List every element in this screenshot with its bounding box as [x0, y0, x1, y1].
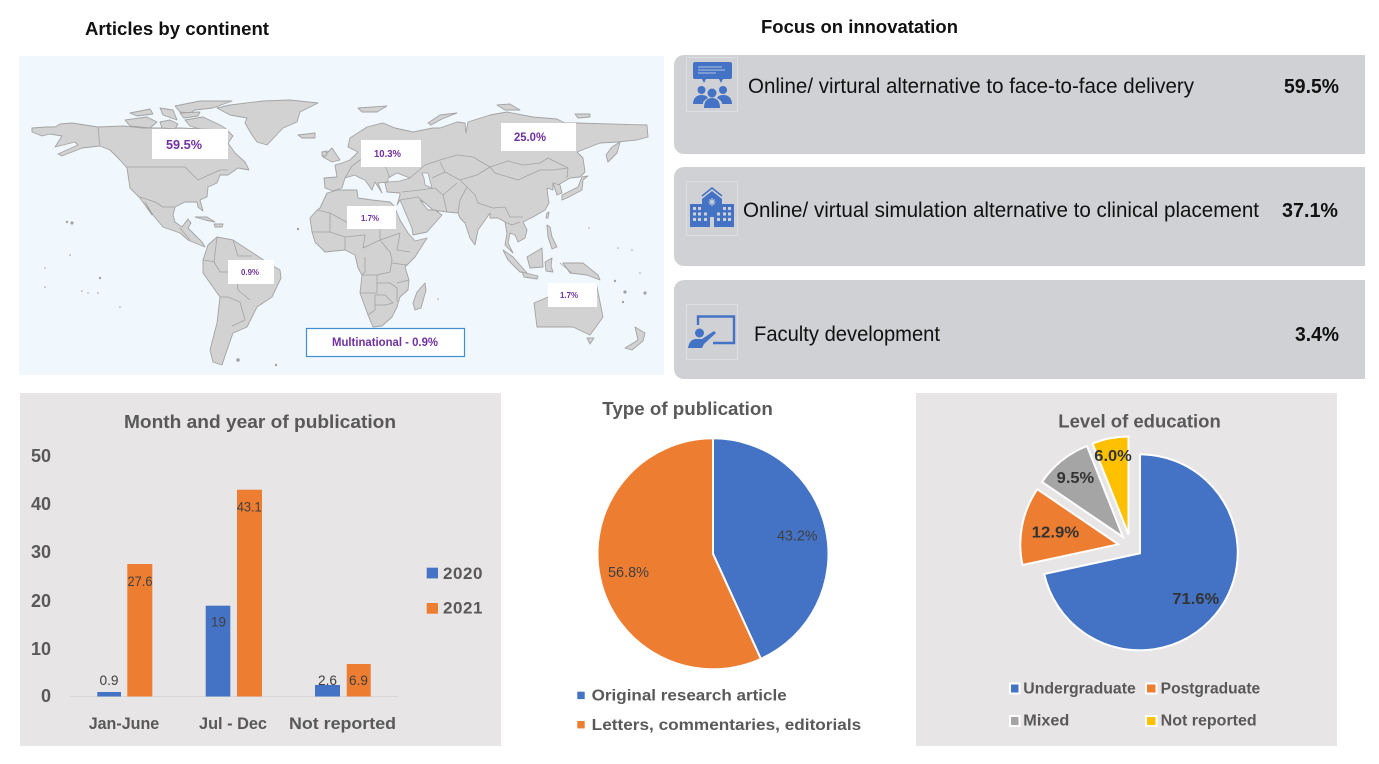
chart title: Month and year of publication	[124, 412, 396, 432]
pie labels	[608, 528, 818, 581]
panel: world map	[19, 56, 664, 375]
data labels: 19	[211, 614, 226, 630]
legend: Letters, commentaries, editorials	[592, 717, 861, 734]
pie labels: 9.5%	[1057, 470, 1094, 487]
legend: Not reported	[1161, 713, 1257, 730]
y axis labels: 50	[31, 446, 51, 466]
label: Multinational 0.9%: Multinational - 0.9%	[332, 335, 438, 349]
bars: Jul-Dec	[206, 490, 262, 696]
data labels	[100, 499, 368, 688]
data labels: 2.6	[318, 672, 337, 688]
chart title: Type of publication	[602, 399, 773, 419]
data labels: 6.9	[349, 672, 368, 688]
legend: Mixed	[1023, 713, 1069, 730]
text: simulation alternative: Online/ virtual simulation alternative to clinical placement	[743, 199, 1259, 222]
data labels: 43.1	[237, 499, 262, 515]
label: Africa 1.7%	[347, 206, 396, 229]
label: South America 0.9%: 0.9%	[241, 268, 259, 277]
value: 37.1%: 37.1%	[1282, 200, 1338, 222]
category labels	[89, 714, 396, 733]
legend: Postgraduate	[1161, 680, 1261, 697]
Korea	[553, 183, 562, 195]
pie labels: 43.2%	[777, 528, 818, 545]
North America	[32, 123, 249, 247]
legend: Original research article	[592, 688, 787, 705]
legend	[1010, 680, 1261, 730]
pie labels: 56.8%	[608, 564, 649, 581]
y axis labels: 40	[31, 494, 51, 514]
legend	[427, 564, 482, 618]
label: Oceania 1.7%	[548, 283, 597, 307]
label: Asia 25.0%: 25.0%	[514, 130, 546, 144]
bars: Not reported	[315, 664, 371, 696]
label: North America 59.5%: 59.5%	[166, 137, 202, 152]
pie labels	[1032, 448, 1219, 608]
text: online alternative: Online/ virtural alternative to face-to-face delivery	[748, 75, 1194, 98]
category labels: Not reported	[289, 714, 396, 733]
y axis labels: 10	[31, 639, 51, 659]
Eurasia	[324, 112, 648, 253]
label: Africa 1.7%: 1.7%	[361, 214, 379, 223]
label: South America 0.9%	[228, 260, 274, 284]
decorative small islands	[44, 221, 647, 366]
bars: Jan-June	[97, 564, 152, 696]
label: North America 59.5%	[152, 129, 228, 159]
category labels: Jul - Dec	[199, 714, 267, 733]
panel: bar chart month and year of publication	[20, 393, 501, 746]
legend: 2021	[443, 599, 482, 618]
pie labels: 71.6%	[1172, 591, 1219, 608]
label: Asia 25.0%	[501, 123, 576, 151]
Africa	[310, 190, 427, 327]
value: 3.4%: 3.4%	[1295, 324, 1339, 346]
Cuba and Hispaniola	[195, 217, 215, 222]
y axis labels: 0	[41, 686, 51, 706]
chart title: Level of education	[1058, 412, 1221, 432]
pie labels: 6.0%	[1094, 448, 1132, 465]
exploded pie	[1020, 436, 1238, 650]
decorative country borders	[98, 127, 100, 146]
icon: hospital building	[686, 182, 738, 236]
text: faculty development: Faculty development	[754, 323, 940, 346]
label: Europe 10.3%	[361, 140, 421, 167]
data labels: 27.6	[128, 573, 153, 589]
panel: simulation alternative to clinical placement	[674, 167, 1365, 266]
y axis labels	[31, 446, 51, 706]
Black Sea	[388, 173, 410, 182]
legend: Undergraduate	[1023, 680, 1136, 697]
South America	[203, 237, 281, 365]
map: continents	[32, 100, 648, 366]
heading: Focus on innovatation: Focus on innovatation	[761, 17, 958, 37]
legend: 2020	[443, 564, 482, 583]
label: Oceania 1.7%: 1.7%	[560, 291, 578, 300]
panel: pie chart type of publication	[577, 399, 861, 734]
icon: group discussion	[686, 58, 738, 112]
heading: Articles by continent: Articles by continent	[85, 19, 269, 39]
panel: pie chart level of education	[916, 393, 1337, 746]
label: Europe 10.3%: 10.3%	[374, 149, 401, 160]
y axis labels: 20	[31, 591, 51, 611]
legend	[577, 688, 861, 734]
y axis labels: 30	[31, 542, 51, 562]
value: 59.5%: 59.5%	[1284, 76, 1339, 98]
category labels: Jan-June	[89, 714, 159, 733]
pie	[598, 438, 829, 669]
panel: faculty development	[674, 280, 1365, 379]
data labels: 0.9	[100, 672, 119, 688]
icon: teacher at board	[686, 304, 738, 360]
label: Multinational 0.9%	[306, 328, 464, 356]
Caspian Sea	[422, 173, 432, 188]
pie labels: 12.9%	[1032, 524, 1079, 541]
panel: online alternative to face-to-face	[674, 55, 1365, 154]
